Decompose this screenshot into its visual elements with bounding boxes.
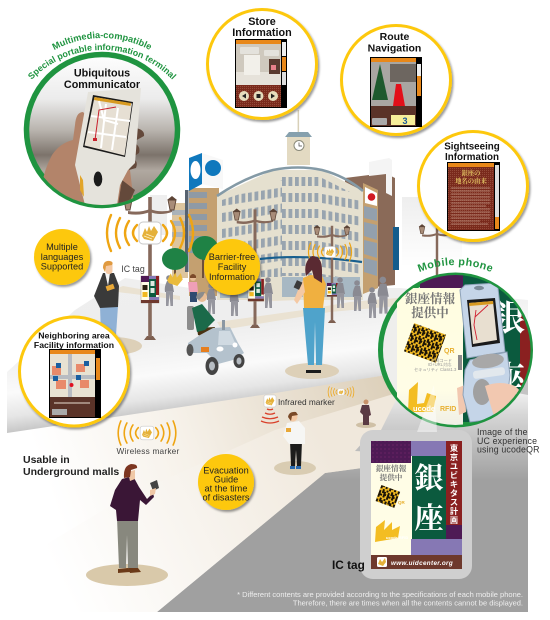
label: image of UC experience: using ucodeQR — [477, 444, 540, 454]
enlarged poster and phone: 銀 — [489, 298, 525, 338]
icon: small distant wave — [328, 387, 354, 397]
poster: IC tag: QR — [398, 500, 406, 505]
poster: IC tag: 計 — [450, 506, 459, 516]
icon: wireless marker — [118, 421, 176, 445]
poster: IC tag: 東 — [450, 443, 458, 453]
poster: IC tag: キ — [450, 480, 458, 489]
heading: usable in underground malls — [23, 454, 119, 478]
enlarged poster and phone: RFID — [440, 406, 456, 413]
poster: IC tag: ucode RFID — [386, 535, 408, 540]
floating tag icon — [166, 271, 184, 287]
heading: usable in underground malls: Usable in — [23, 454, 70, 466]
IC tags on lamp posts — [141, 276, 338, 303]
ground: upper plaza — [7, 278, 528, 433]
poster: IC tag: タ — [450, 488, 458, 498]
callout: evacuation guide: Evacuation — [203, 466, 249, 476]
enlarged poster and phone: ucode — [413, 404, 435, 413]
poster: IC tag: 銀座情報 — [376, 463, 407, 473]
callout: barrier-free: Information — [209, 272, 255, 282]
trees — [162, 236, 218, 282]
enlarged poster and phone: 共同コード — [431, 357, 452, 364]
label: infrared marker: Infrared marker — [278, 397, 335, 407]
callout: evacuation guide: at the time — [205, 484, 247, 494]
label: image of UC experience: Image of the — [477, 427, 528, 437]
callout: multiple languages: languages — [41, 252, 84, 262]
poster: IC tag: ビ — [450, 470, 458, 480]
distant crowd silhouettes — [165, 275, 389, 318]
panel: sightseeing information: Information — [445, 152, 499, 163]
brown building with flag — [345, 158, 399, 294]
callout: evacuation guide: Guide — [214, 474, 238, 484]
panel: store information — [208, 10, 316, 118]
panel: store information: Store — [248, 16, 276, 28]
callout: multiple languages: Supported — [41, 262, 83, 272]
label: IC tag: IC tag — [332, 558, 365, 572]
icon: infrared marker — [261, 395, 279, 423]
poster: IC tag: 画 — [450, 516, 458, 525]
enlarged poster and phone: 銀座情報 — [405, 291, 455, 306]
panel: neighboring area facility information: Facility information — [34, 340, 114, 350]
curved caption: multimedia-compatible: Multimedia-compatible — [52, 32, 151, 50]
QR code — [404, 323, 446, 363]
panel: route navigation: Route — [380, 31, 410, 43]
lamp posts — [123, 196, 455, 340]
screen: navigation view: 3 — [402, 116, 408, 126]
enlarged poster and phone: 座 — [489, 360, 527, 400]
screen: store view — [235, 39, 287, 108]
poster: IC tag: 提供中 — [380, 472, 403, 482]
ground: tan paving stripes — [110, 286, 420, 330]
poster: IC tag: 京 — [450, 452, 458, 462]
label: image of UC experience: UC experience — [477, 436, 537, 446]
poster: IC tag: ス — [450, 498, 458, 507]
panel: sightseeing information — [418, 132, 528, 240]
enlarged poster and phone: セキュリティ Class1.3 — [414, 367, 457, 373]
screen: sightseeing text: 銀座の — [462, 168, 480, 177]
poster: IC tag — [371, 441, 462, 569]
heading: usable in underground malls: Underground malls — [23, 466, 119, 478]
panel: mobile phone — [378, 258, 533, 428]
main clock tower building — [217, 110, 363, 300]
blue and white rooftop sign — [189, 153, 223, 191]
enlarged poster and phone: 提供中 — [411, 305, 449, 320]
enlarged poster and phone: QR — [444, 348, 454, 355]
callout: multiple languages: Multiple — [46, 242, 78, 252]
pale background building — [150, 195, 462, 267]
heading: ubiquitous communicator: Ubiquitous — [74, 68, 130, 80]
scooter body — [186, 312, 244, 375]
poster: IC tag: 銀 — [414, 462, 444, 495]
curved caption: special portable information terminal: Special portable information terminal — [28, 44, 177, 80]
pink woman — [188, 274, 198, 302]
panel: ubiquitous communicator — [24, 32, 180, 208]
man with IC tag reader — [82, 261, 142, 355]
label: wireless marker: Wireless marker — [117, 446, 179, 456]
scooter rider — [186, 292, 244, 375]
panel: neighboring area facility information: Neighboring area — [38, 330, 110, 340]
footnote — [237, 590, 523, 608]
panel: IC tag poster bubble — [355, 385, 472, 579]
panel: sightseeing information: Sightseeing — [444, 142, 500, 152]
enlarged poster and phone — [397, 272, 535, 428]
panel: ubiquitous communicator: Communicator — [64, 79, 141, 91]
hand behind phone — [457, 385, 466, 415]
ground: pale walkway band — [45, 392, 400, 612]
striped building behind — [172, 203, 188, 278]
callout: evacuation guide: of disasters — [203, 492, 250, 502]
phone — [458, 283, 519, 422]
callout: evacuation guide — [198, 454, 254, 510]
callout: multiple languages — [34, 229, 90, 285]
panel: neighboring area facility information — [20, 317, 128, 426]
screen: area map — [49, 349, 101, 418]
panel: route navigation — [342, 26, 450, 134]
curved caption: mobile phone: Mobile phone — [417, 258, 492, 272]
poster: IC tag: 座 — [414, 502, 445, 535]
distant man — [356, 400, 376, 428]
screen: sightseeing text — [447, 162, 500, 231]
enlarged poster and phone: ID+URL対応 — [428, 361, 452, 368]
man in purple jacket — [86, 464, 168, 586]
poster: IC tag: ユ — [450, 462, 458, 471]
label: IC tag near lamp: IC tag — [121, 264, 145, 274]
callout: barrier-free — [204, 239, 260, 295]
label: image of UC experience — [477, 427, 540, 454]
ground: grey fade at right — [7, 380, 528, 612]
photo: hand holding terminal — [42, 88, 144, 212]
screen: sightseeing text: 地名の由来 — [455, 176, 487, 185]
woman in orange top — [285, 256, 339, 379]
panel: store information: Information — [232, 27, 292, 39]
footnote: Therefore, there are times when all the contents cannot be displayed. — [293, 598, 523, 608]
callout: barrier-free: Barrier-free — [209, 252, 255, 262]
icon: large wireless tag — [107, 215, 193, 251]
callout: barrier-free: Facility — [218, 262, 247, 272]
man in white sweater — [274, 412, 316, 475]
poster: IC tag: www.uidcenter.org — [391, 560, 453, 567]
footnote: * Different contents are provided according to the specifications of each mobile phone. — [237, 590, 523, 599]
icon: wireless tag by woman — [308, 243, 352, 261]
ground: tan walkway — [7, 372, 405, 612]
tan building with sign — [185, 153, 223, 296]
panel: route navigation: Navigation — [368, 42, 421, 54]
